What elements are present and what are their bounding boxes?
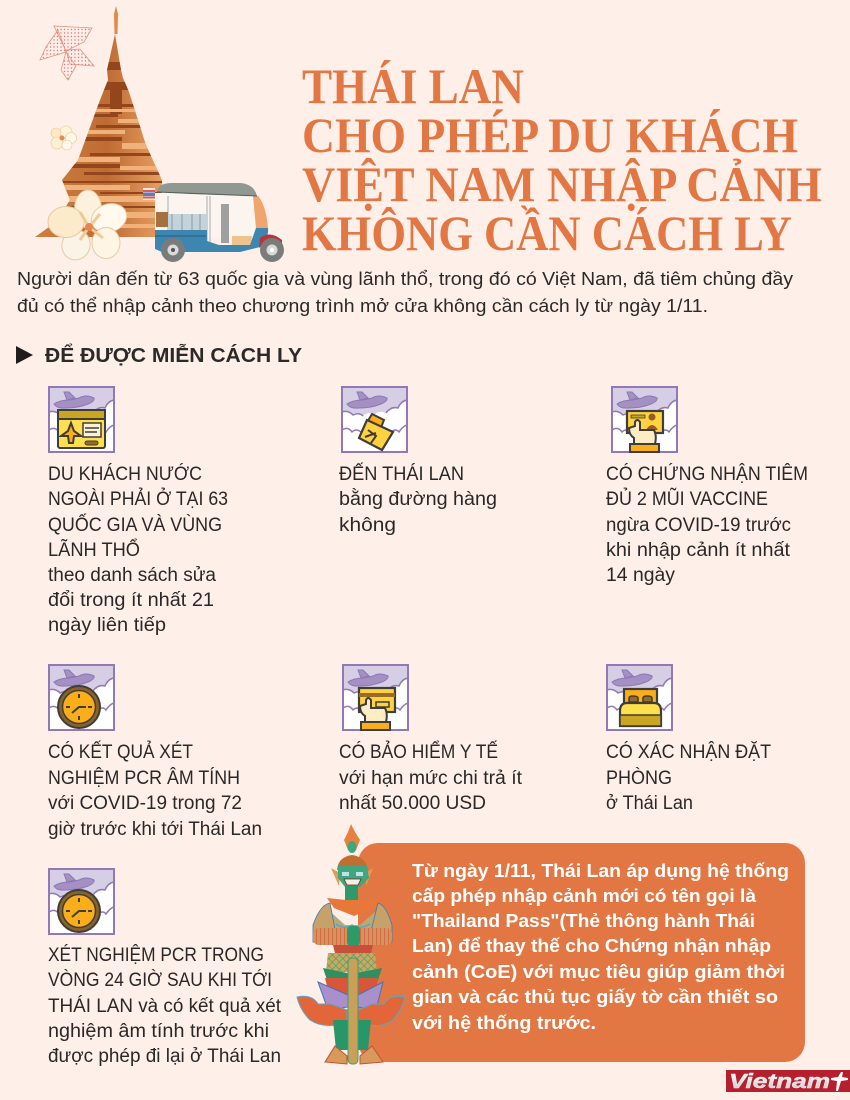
icon: tuk-tuk [155, 183, 284, 262]
item: health insurance [339, 665, 523, 814]
icon: small flower [51, 126, 76, 150]
icon: web page with plane [49, 387, 114, 452]
text: nhất 50.000 USD [339, 793, 486, 814]
icon: heading arrow [16, 346, 33, 364]
item: arrive by air [339, 387, 497, 536]
text: QUỐC GIA VÀ VÙNG [48, 514, 222, 536]
text: THÁI LAN và có kết quả xét [48, 996, 282, 1017]
title [302, 58, 822, 261]
title: VIỆT NAM NHẬP CẢNH [302, 156, 822, 212]
icon: spire and stupa [35, 6, 162, 237]
heading text: ĐỂ ĐƯỢC MIỄN CÁCH LY [45, 344, 302, 367]
icon: hand holding id card [612, 387, 677, 452]
text [339, 463, 497, 536]
text: theo danh sách sửa [48, 565, 216, 586]
text: ĐỦ 2 MŨI VACCINE [606, 488, 768, 510]
text [48, 741, 262, 840]
text [606, 463, 808, 586]
item: 63 countries [48, 387, 228, 636]
title: THÁI LAN [302, 58, 524, 114]
icon: clock [49, 665, 114, 730]
text: LÃNH THỔ [48, 539, 140, 561]
text: bằng đường hàng [339, 488, 497, 510]
icon: plumeria flower [48, 190, 130, 264]
callout: Thailand Pass: Từ ngày 1/11, Thái Lan áp dụng hệ thống [412, 860, 789, 881]
text: đổi trong ít nhất 21 [48, 590, 214, 611]
icon: hand with credit card [343, 665, 408, 730]
callout: Thailand Pass: cảnh (CoE) với mục tiêu giúp giảm thời [412, 961, 785, 982]
text: 14 ngày [606, 565, 675, 586]
text [48, 944, 282, 1067]
text [606, 741, 771, 814]
illustration: Thai giant guardian [297, 824, 405, 1064]
callout: Thailand Pass: "Thailand Pass"(Thẻ thông hành Thái [412, 910, 755, 931]
callout: Thailand Pass: Lan) để thay thế cho Chứng nhận nhập [412, 935, 771, 956]
text: ngày liên tiếp [48, 615, 166, 636]
section heading [16, 344, 302, 367]
text: CÓ BẢO HIỂM Y TẾ [339, 741, 498, 763]
text: NGHIỆM PCR ÂM TÍNH [48, 767, 240, 789]
item: PCR test [48, 665, 262, 840]
intro text [17, 268, 794, 316]
text: CÓ KẾT QUẢ XÉT [48, 741, 193, 763]
intro text: Người dân đến từ 63 quốc gia và vùng lãnh thổ, trong đó có Việt Nam, đã tiêm chủng đầy [17, 268, 794, 289]
text: với hạn mức chi trả ít [339, 768, 523, 789]
text: ở Thái Lan [606, 793, 693, 814]
item: room booking [606, 665, 771, 814]
logo: Vietnam+ [726, 1070, 850, 1093]
text: được phép đi lại ở Thái Lan [48, 1046, 281, 1067]
text [48, 463, 228, 636]
icon: thai flag [143, 188, 155, 200]
callout: Thailand Pass: gian và các thủ tục giấy tờ cần thiết so [412, 986, 778, 1007]
item: vaccine certificate [606, 387, 808, 586]
text: với COVID-19 trong 72 [48, 793, 242, 814]
item: PCR test after arrival [48, 869, 282, 1067]
text: khi nhập cảnh ít nhất [606, 540, 791, 561]
icon: bed [607, 665, 672, 730]
text: DU KHÁCH NƯỚC [48, 463, 202, 485]
text: VÒNG 24 GIỜ SAU KHI TỚI [48, 969, 272, 991]
text: không [339, 515, 396, 536]
text: NGOÀI PHẢI Ở TẠI 63 [48, 488, 228, 510]
icon: plane ticket [342, 387, 407, 452]
callout: Thailand Pass: với hệ thống trước. [412, 1012, 596, 1033]
text: nghiệm âm tính trước khi [48, 1021, 269, 1042]
text: PHÒNG [606, 767, 672, 789]
title: KHÔNG CẦN CÁCH LY [302, 204, 792, 261]
illustration: temple, flowers and tuk-tuk [30, 6, 284, 264]
text: ngừa COVID-19 trước [606, 515, 791, 536]
callout: Thailand Pass [358, 843, 805, 1062]
text: CÓ XÁC NHẬN ĐẶT [606, 741, 771, 763]
text: XÉT NGHIỆM PCR TRONG [48, 944, 264, 966]
text [339, 741, 523, 814]
logo: Vietnam+: Vietnam [729, 1071, 830, 1093]
text: CÓ CHỨNG NHẬN TIÊM [606, 463, 808, 485]
text: ĐẾN THÁI LAN [339, 463, 464, 485]
icon: clock [49, 869, 114, 934]
title: CHO PHÉP DU KHÁCH [302, 107, 798, 163]
intro text: đủ có thể nhập cảnh theo chương trình mở cửa không cần cách ly từ ngày 1/11. [17, 295, 708, 316]
icon: decorative leaf [40, 26, 94, 80]
text: giờ trước khi tới Thái Lan [48, 819, 262, 840]
callout: Thailand Pass: cấp phép nhập cảnh mới có tên gọi là [412, 885, 757, 906]
